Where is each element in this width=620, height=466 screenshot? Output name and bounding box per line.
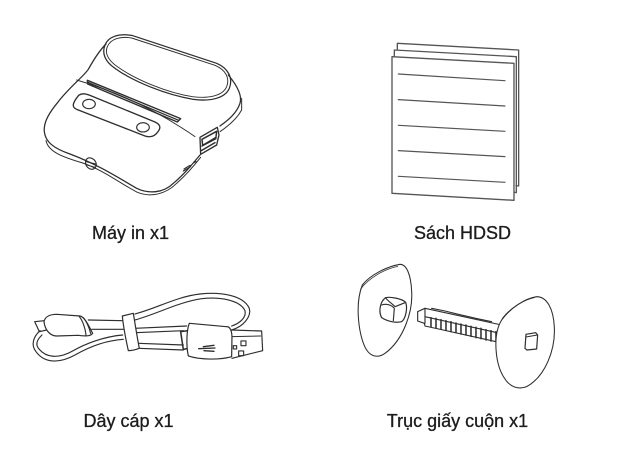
label: printer: Máy in x1 (92, 223, 169, 243)
label: USB cable: Dây cáp x1 (83, 411, 174, 431)
icon: user manual (392, 43, 519, 200)
left disc (358, 264, 412, 356)
icon: printer (44, 35, 242, 195)
label: paper roll spindle: Trục giấy cuộn x1 (387, 411, 528, 431)
icon: paper roll spindle (358, 264, 554, 388)
right disc (496, 297, 554, 388)
icon: USB cable (33, 293, 263, 361)
spindle (418, 308, 502, 342)
label: user manual: Sách HDSD (414, 223, 511, 243)
